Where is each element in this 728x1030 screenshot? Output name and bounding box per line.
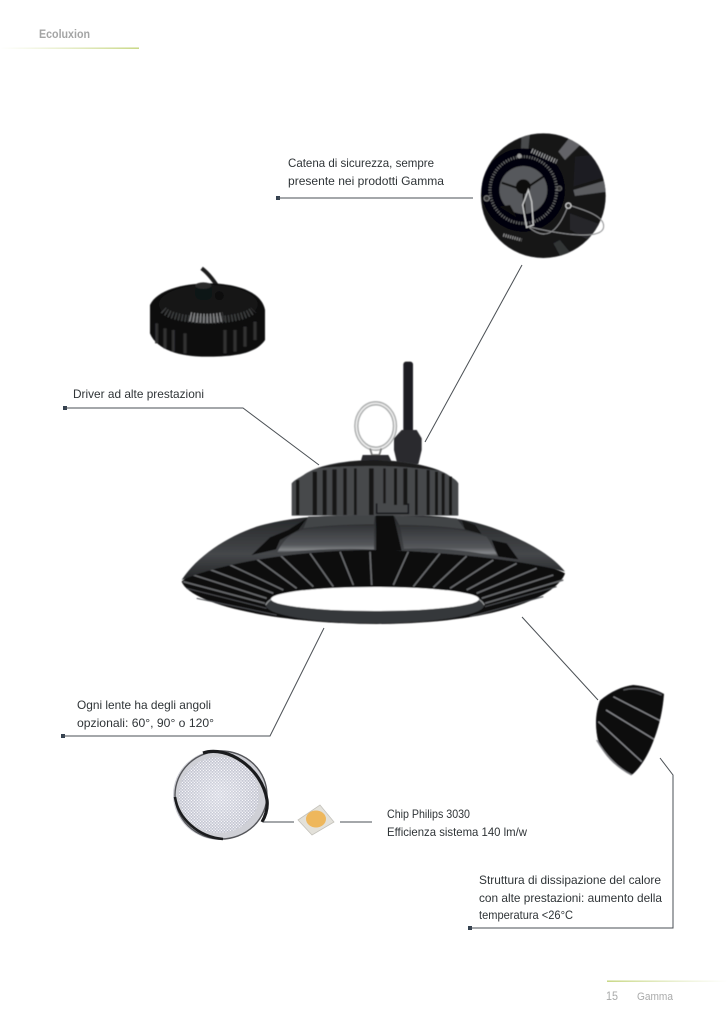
callout: lens angles [61, 628, 324, 738]
lamp: arm plates [277, 525, 374, 553]
header: Ecoluxion [0, 29, 139, 49]
icon: safety chain detail photo [481, 132, 607, 262]
lamp: cable [403, 362, 413, 433]
lamp: dark gaps in dish [252, 518, 307, 555]
callout: chip: Efficienza sistema 140 lm/w [387, 825, 527, 839]
header: Ecoluxion: Ecoluxion [39, 29, 90, 41]
footer: page number and section: 15 [606, 991, 618, 1003]
callout: heat dissipation [468, 758, 673, 930]
callout: driver [63, 387, 319, 465]
callout: driver: Driver ad alte prestazioni [73, 387, 204, 401]
icon: driver photo [150, 268, 265, 357]
lamp: lens ring [266, 587, 484, 623]
callout: heat dissipation: temperatura <26°C [479, 908, 573, 922]
icon: LED lens disc photo [173, 750, 267, 840]
leader: heat structure to lamp [522, 617, 598, 700]
lamp: underside with fins [182, 548, 565, 624]
callout: lens angles: Ogni lente ha degli angoli [77, 698, 211, 712]
main product: high bay lamp [182, 362, 565, 624]
icon: Philips 3030 chip photo [263, 805, 372, 835]
callout: lens angles: opzionali: 60°, 90° o 120° [77, 716, 214, 730]
lamp: cable gland [394, 430, 422, 464]
callout: safety chain [276, 156, 522, 442]
callout: chip: Chip Philips 3030 [387, 807, 470, 821]
lamp: eye bolt [356, 403, 395, 455]
callout: heat dissipation: con alte prestazioni: aumento della [479, 891, 662, 905]
callout: chip [387, 807, 527, 839]
callout: safety chain: presente nei prodotti Gamma [288, 174, 444, 188]
callout: safety chain: Catena di sicurezza, sempre [288, 156, 434, 170]
footer: page number and section: Gamma [637, 991, 674, 1003]
callout: heat dissipation: Struttura di dissipazione del calore [479, 873, 661, 887]
icon: heat dissipation structure photo [596, 685, 664, 775]
lamp: finned housing [292, 460, 458, 516]
footer: page number and section [606, 980, 728, 1003]
lamp: upper dish [182, 516, 565, 580]
